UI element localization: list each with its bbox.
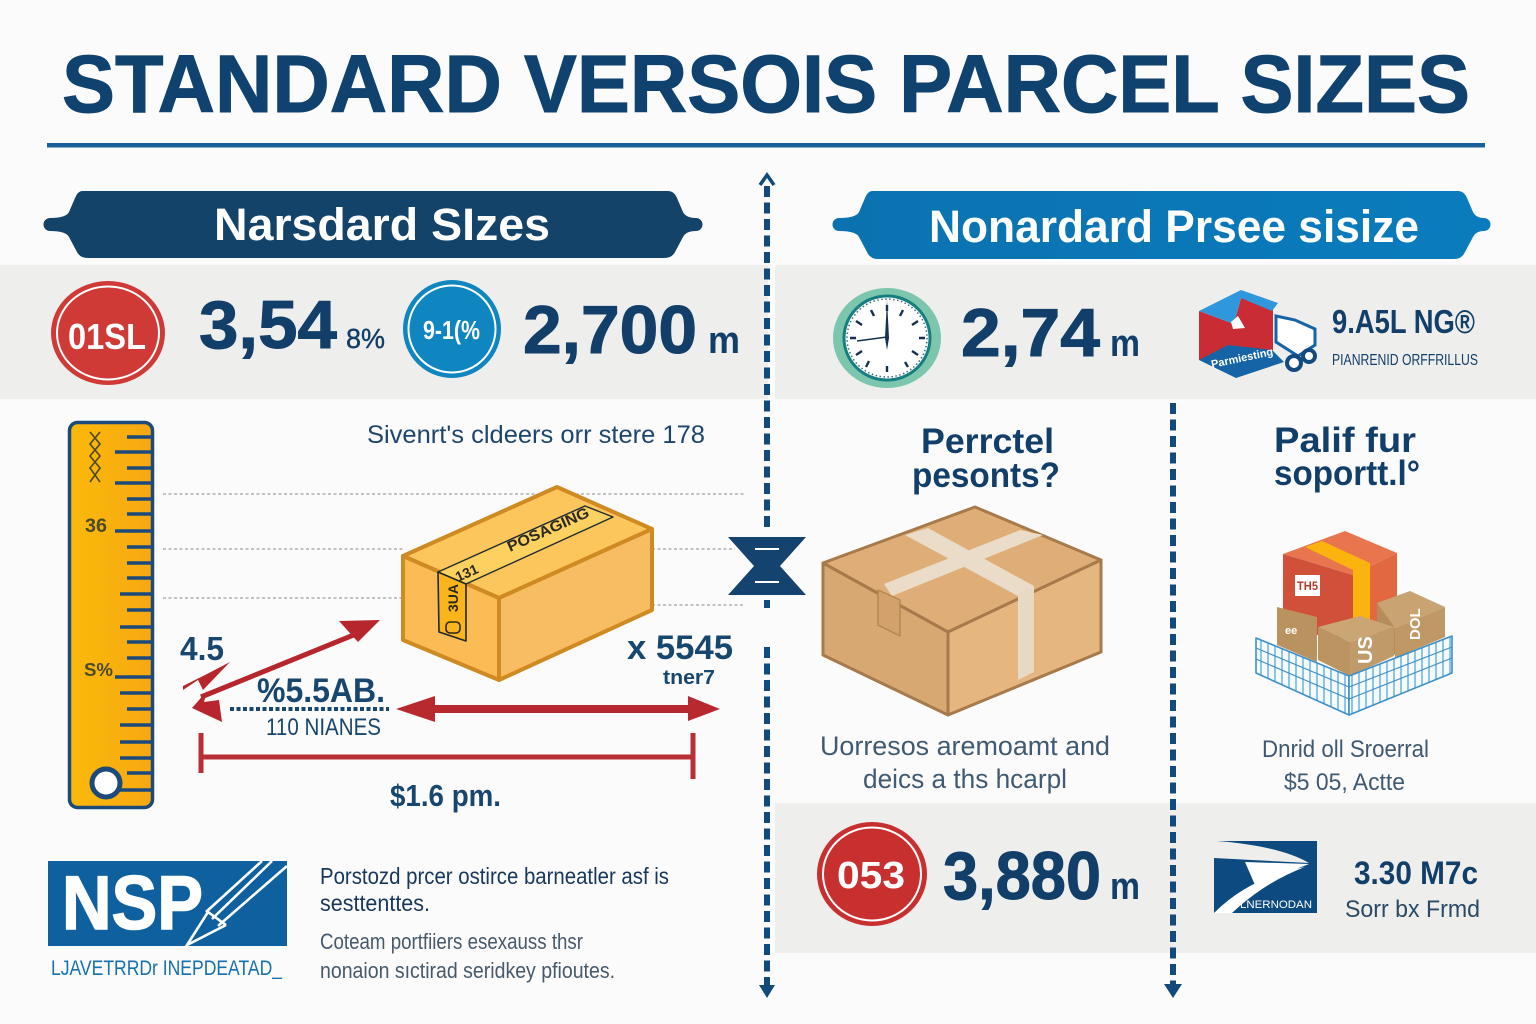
text block: basket description: $5 05, Actte: [1284, 769, 1405, 796]
dimension line: [201, 733, 693, 779]
label: 1.6 pm: $1.6 pm.: [390, 778, 501, 813]
badge: red 01SL: [51, 281, 165, 385]
stat: 3.30 label: 3.30 M7c: [1354, 855, 1478, 891]
label: x 5545: tner7: [663, 667, 715, 689]
divider: right dashed arrow: [1164, 403, 1182, 998]
icon: parcels in basket: TH5: [1297, 579, 1318, 593]
heading: palif fur: soportt.l°: [1274, 454, 1420, 493]
stat: weight label: [1332, 303, 1478, 369]
stat: 3,880 m: 3,880: [943, 838, 1101, 914]
heading: palif fur: Palif fur: [1274, 421, 1416, 460]
banner: nonstandard sizes: Nonardard Prsee sisize: [929, 201, 1419, 252]
text block: footnote: sesttenttes.: [320, 890, 430, 916]
text block: box description: Uorresos aremoamt and: [820, 731, 1110, 761]
logo: postal eagle: [1214, 841, 1317, 913]
icon: parcels in basket: US: [1355, 636, 1377, 664]
banner: standard sizes: [44, 191, 702, 258]
badge: red 053: 053: [837, 855, 905, 897]
text block: footnote: [320, 863, 669, 983]
icon: ruler: [70, 422, 152, 808]
icon: parcels in basket: [1256, 531, 1452, 715]
stat: 3,54 8%: 8%: [346, 323, 385, 354]
logo: NSP: NSP: [62, 861, 203, 946]
icon: hourglass: [728, 537, 806, 595]
stat: 3.30 label: [1345, 855, 1480, 923]
label: x 5545: [627, 629, 733, 689]
band: left stats background: [0, 265, 768, 399]
heading: parcel presents: [912, 422, 1060, 495]
icon: clock: [833, 288, 941, 388]
band: right stats background: [775, 265, 1536, 399]
icon: ruler: 36: [85, 516, 107, 537]
stat: 3,880 m: m: [1110, 866, 1140, 908]
arrow: small red: [183, 662, 230, 690]
stat: 3,54 8%: 3,54: [199, 287, 337, 363]
icon: parcels in basket: ee: [1285, 625, 1297, 637]
text block: basket description: [1262, 736, 1429, 796]
logo: NSP: LJAVETRRDr INEPDEATAD_: [51, 957, 282, 980]
divider: center dashed arrow: [759, 175, 775, 998]
text block: footnote: Porstozd prcer ostirce barneatler asf is: [320, 863, 669, 889]
logo: postal eagle: LNERNODAN: [1240, 899, 1312, 911]
heading: parcel presents: pesonts?: [912, 456, 1060, 495]
badge: blue percent: [403, 280, 501, 378]
icon: standard parcel box: 131: [453, 561, 481, 585]
heading: palif fur: [1274, 421, 1420, 493]
label: 4.5: 4.5: [180, 630, 224, 667]
text block: basket description: Dnrid oll Sroerral: [1262, 736, 1429, 763]
label: x 5545: x 5545: [627, 629, 733, 667]
text block: footnote: Coteam portfiiers esexauss thsr: [320, 929, 583, 954]
stat: 3.30 label: Sorr bx Frmd: [1345, 896, 1480, 923]
icon: delivery truck box: Parmiesting: [1210, 346, 1274, 371]
badge: red 01SL: 01SL: [68, 316, 146, 357]
icon: standard parcel box: [403, 487, 652, 680]
banner: standard sizes: Narsdard SIzes: [214, 199, 550, 250]
arrow: double red: [396, 696, 720, 722]
icon: nonstandard cardboard box: [823, 507, 1101, 715]
text block: footnote: nonaion sıctirad seridkey pfioutes.: [320, 958, 615, 983]
stat: 2,74 m: 2,74: [961, 295, 1100, 371]
icon: delivery truck box: [1199, 290, 1315, 378]
stat: 2,74 m: m: [1110, 323, 1140, 365]
icon: standard parcel box: 3UA: [445, 584, 461, 612]
arrow: diagonal red: [192, 620, 380, 722]
icon: parcels in basket: DOL: [1407, 608, 1424, 640]
stat: weight label: PIANRENID ORFFRILLUS: [1332, 352, 1478, 369]
caption: standard sizes note: Sivenrt's cldeers orr stere 178: [367, 421, 705, 449]
title: STANDARD VERSOIS PARCEL SIZES: [62, 39, 1470, 130]
stat: 2,700 m: 2,700: [523, 292, 697, 368]
logo: NSP: [48, 861, 287, 980]
icon: standard parcel box: POSAGING: [505, 504, 592, 556]
band: lower right stats background: [775, 803, 1536, 953]
stat: 2,700 m: m: [708, 320, 740, 362]
stat: weight label: 9.A5L NG®: [1332, 303, 1475, 340]
badge: blue percent: 9-1(%: [423, 315, 480, 345]
text block: box description: [820, 731, 1110, 794]
badge: red 053: [817, 822, 927, 926]
label: 5.5AB: %5.5AB.: [257, 672, 385, 710]
label: 110 nianes: 110 NIANES: [266, 714, 381, 741]
icon: ruler: S%: [84, 660, 113, 680]
heading: parcel presents: Perrctel: [921, 422, 1054, 461]
banner: nonstandard sizes: [833, 191, 1490, 259]
text block: box description: deics a ths hcarpl: [863, 764, 1067, 794]
